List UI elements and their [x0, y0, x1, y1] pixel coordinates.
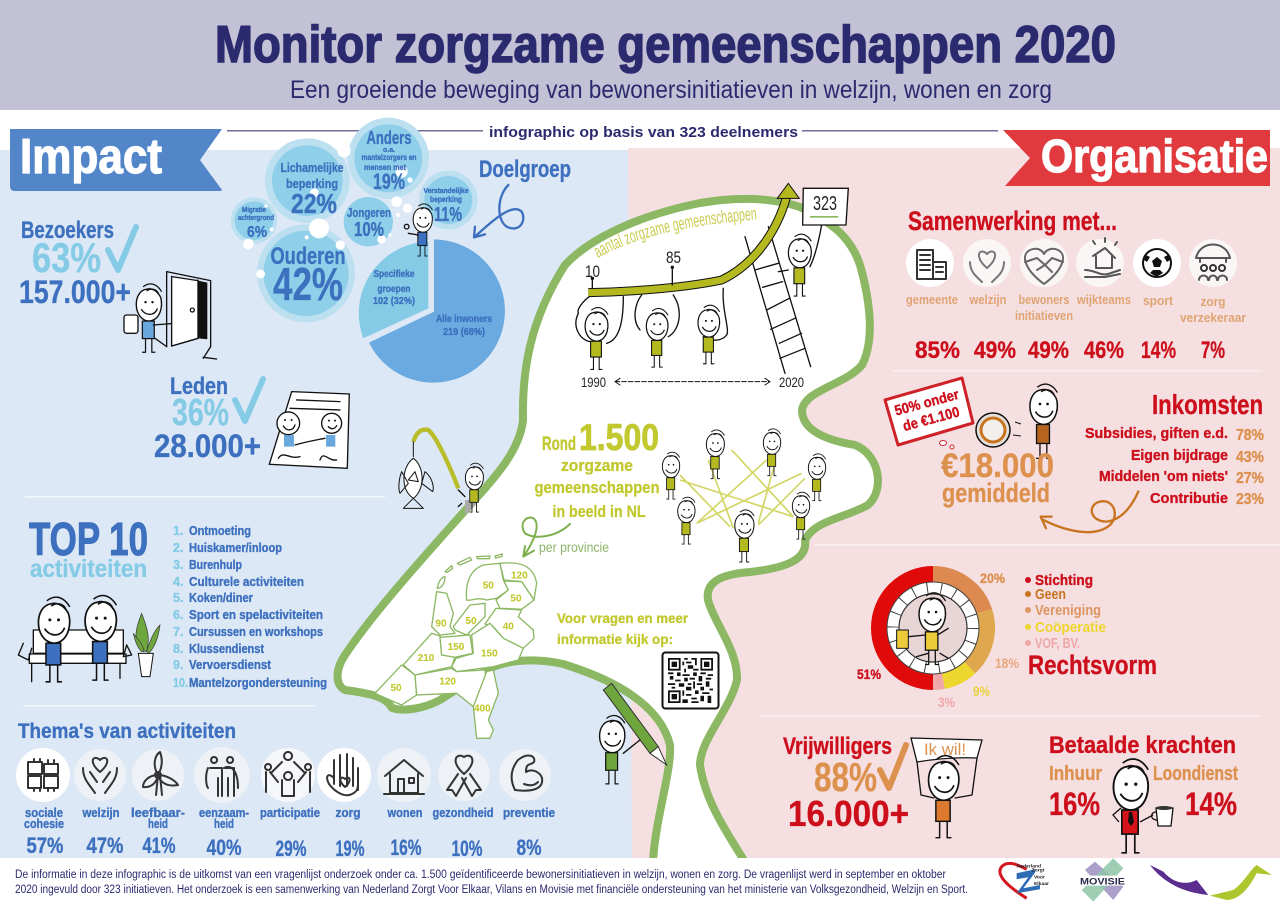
thema's percentages: 40% — [206, 835, 242, 860]
top 10 list: Cursussen en workshops — [189, 625, 323, 639]
map: province values: 150 — [481, 649, 498, 660]
illustration: person at door — [124, 272, 217, 359]
impact banner — [10, 129, 222, 191]
illustration: fisherman — [399, 430, 483, 515]
samenwerking labels: sport — [1143, 293, 1174, 308]
top 10 list: 2. — [173, 541, 183, 555]
inkomsten: 27% — [1236, 470, 1264, 487]
samenwerking labels: zorg — [1200, 294, 1226, 309]
samenwerking labels: verzekeraar — [1180, 310, 1246, 325]
betaalde krachten statistic — [1049, 732, 1238, 822]
samenwerking percentages — [915, 337, 1225, 364]
top 10 list: 5. — [173, 591, 183, 605]
thema's labels — [24, 806, 555, 831]
doelgroep heading and labels: Verstandelijke — [424, 186, 468, 195]
top 10 list: Klussendienst — [189, 642, 265, 656]
callout: 50% onder de 1.100 — [885, 378, 973, 449]
doelgroep heading and labels: Specifieke — [374, 269, 415, 280]
doelgroep heading and labels: Migratie — [242, 207, 266, 214]
map: province values: 120 — [439, 676, 456, 687]
icons row: thema's — [16, 747, 551, 803]
inkomsten: 78% — [1236, 427, 1264, 444]
panel: impact background — [0, 150, 640, 858]
samenwerking labels: welzijn — [969, 292, 1007, 307]
arrow: per provincie — [523, 518, 609, 557]
doelgroep heading and labels: 219 (68%) — [443, 327, 485, 338]
illustration: signed contract — [269, 392, 349, 468]
thema's labels: heid — [148, 817, 168, 831]
text block: rond 1.500 — [534, 417, 660, 521]
doelgroep heading and labels: 42% — [273, 258, 343, 310]
chart caption: aantal zorgzame gemeenschappen: aantal zorgzame gemeenschappen — [594, 210, 756, 258]
vrijwilligers statistic: 88% — [814, 754, 877, 800]
doelgroep heading and labels: groepen — [378, 284, 410, 295]
text block: rond 1.500: zorgzame — [561, 456, 633, 475]
arrow: doelgroep — [474, 185, 523, 237]
heading: rechtsvorm: Rechtsvorm — [1028, 650, 1157, 680]
thema's percentages: 19% — [336, 836, 364, 861]
leden statistic — [154, 373, 263, 464]
top 10 list: 9. — [173, 658, 183, 672]
thema's percentages — [26, 833, 542, 861]
footer — [0, 858, 1280, 905]
map: province values: 50 — [390, 683, 402, 694]
samenwerking labels: gemeente — [906, 292, 958, 307]
chart numbers: 323 — [813, 193, 837, 215]
donut labels: 51% — [857, 666, 881, 682]
map: province values: 40 — [503, 621, 514, 632]
top 10 list: 3. — [173, 558, 183, 572]
illustration: person on trampoline — [897, 593, 948, 664]
chart numbers: 2020 — [779, 374, 804, 390]
top 10 list: Ontmoeting — [189, 524, 251, 538]
footer: De informatie in deze infographic is de uitkomst van een vragenlijst onderzoek onder ca. 1.500 geïdentificeerde bewonersinitiatieven in welzijn, wonen en zorg. De vragenlijst werd in september en oktober — [15, 869, 946, 881]
map: province values: 150 — [448, 642, 465, 653]
chart numbers: 85 — [666, 248, 681, 267]
network of people — [662, 429, 826, 562]
doelgroep heading and labels: achtergrond — [238, 215, 274, 222]
doelgroep heading and labels: Doelgroep — [479, 156, 571, 183]
doelgroep heading and labels: beperking — [430, 195, 462, 204]
title: Monitor zorgzame gemeenschappen 2020 — [215, 16, 1116, 74]
thema's percentages: 47% — [86, 833, 124, 858]
map: provinces — [375, 554, 537, 738]
text block: rond 1.500: gemeenschappen — [534, 478, 660, 497]
bezoekers statistic: Bezoekers — [21, 217, 114, 244]
donut labels: 3% — [938, 694, 955, 710]
map: province values: 50 — [465, 616, 477, 627]
contact text: Voor vragen en meer — [557, 610, 689, 626]
top 10 list: 10. — [173, 676, 188, 690]
bezoekers statistic — [19, 217, 136, 310]
top 10 list: Mantelzorgondersteuning — [189, 676, 327, 690]
callout: 50% onder de 1.100: 50% onder — [893, 387, 961, 420]
map: province values — [390, 570, 528, 715]
doelgroep heading and labels: Alle inwoners — [436, 314, 492, 325]
thema's labels: gezondheid — [432, 806, 494, 820]
thema's percentages: 16% — [390, 835, 422, 860]
doelgroep heading and labels: beperking — [286, 176, 338, 191]
doelgroep heading and labels: Ouderen — [270, 243, 346, 270]
doelgroep heading and labels: Anders — [366, 128, 412, 148]
thema's labels: welzijn — [82, 806, 120, 820]
doelgroep heading and labels: 6% — [247, 224, 267, 241]
participants line: infographic op basis van 323 deelnemers — [489, 124, 798, 141]
inkomsten: Eigen bijdrage — [1131, 447, 1228, 464]
illustration: person blowing bubbles — [404, 204, 432, 256]
leden statistic: 36% — [172, 392, 229, 434]
statistic: gemiddeld inkomen: gemiddeld — [942, 478, 1050, 508]
samenwerking labels: bewoners — [1018, 292, 1070, 307]
statistic: gemiddeld inkomen — [941, 447, 1054, 508]
thema's percentages: 57% — [26, 833, 64, 858]
top 10 list: Huiskamer/inloop — [189, 541, 282, 555]
donut legend: VOF, BV. — [1035, 635, 1080, 652]
top 10 list: 1. — [173, 524, 183, 538]
top 10 list: Vervoersdienst — [189, 658, 272, 672]
thema's labels: preventie — [503, 806, 555, 820]
map: province values: 50 — [483, 581, 494, 592]
subtitle: Een groeiende beweging van bewonersinitiatieven in welzijn, wonen en zorg — [290, 76, 1052, 104]
doelgroep heading and labels — [238, 128, 571, 338]
illustration: person with sign: Ik wil! — [924, 740, 966, 759]
thema's labels: zorg — [336, 806, 360, 820]
donut legend — [1025, 572, 1106, 652]
doelgroep heading and labels: 102 (32%) — [373, 296, 415, 307]
thema's labels: heid — [214, 817, 234, 831]
heading: samenwerking: Samenwerking met... — [908, 206, 1117, 236]
map: province values: 90 — [435, 619, 447, 630]
map: province values: 50 — [510, 594, 522, 605]
logo: Movisie — [1078, 858, 1127, 902]
callout: 50% onder de 1.100: de €1.100 — [901, 404, 961, 435]
betaalde krachten statistic: Loondienst — [1153, 763, 1238, 785]
map blob: Netherlands shape — [338, 199, 878, 862]
inkomsten: Contributie — [1150, 490, 1228, 507]
donut labels: 9% — [973, 683, 990, 699]
text block: rond 1.500: Rond — [542, 434, 576, 455]
logo: Nederland Zorgt Voor Elkaar: Elkaar — [1034, 881, 1049, 887]
top 10 list: 7. — [173, 625, 183, 639]
top 10 list: 8. — [173, 642, 183, 656]
doelgroep heading and labels: o.a. — [383, 147, 395, 154]
top 10 heading — [29, 513, 148, 583]
donut labels: 18% — [995, 655, 1019, 671]
leden statistic: Leden — [170, 373, 228, 400]
thema's labels: cohesie — [24, 817, 64, 831]
logo: Vilans swimmers — [1150, 865, 1272, 900]
leden statistic: 28.000+ — [154, 428, 261, 464]
statistic: gemiddeld inkomen: €18.000 — [941, 447, 1054, 485]
samenwerking percentages: 85% — [915, 337, 960, 364]
bezoekers statistic: 63% — [32, 234, 101, 281]
doelgroep heading and labels: 10% — [354, 219, 384, 241]
growth chart: stick figures lifting arrow — [576, 183, 848, 385]
thema's percentages: 41% — [142, 833, 176, 858]
contact text: informatie kijk op: — [557, 631, 673, 647]
bezoekers statistic: 157.000+ — [19, 274, 131, 310]
illustration: person rolling coin — [976, 384, 1057, 458]
logo: Nederland Zorgt Voor Elkaar: Nederland — [1017, 863, 1041, 869]
vrijwilligers statistic: 16.000+ — [788, 793, 909, 834]
map: province values: 120 — [511, 570, 528, 581]
heading: thema's: Thema's van activiteiten — [18, 720, 236, 743]
samenwerking percentages: 7% — [1201, 337, 1225, 364]
top 10 list: Culturele activiteiten — [189, 575, 304, 589]
illustration: person with sign — [911, 738, 982, 838]
top 10 list: Burenhulp — [189, 558, 242, 572]
map: province values: 400 — [474, 704, 491, 715]
top 10 heading: activiteiten — [30, 555, 147, 583]
betaalde krachten statistic: Inhuur — [1049, 763, 1102, 785]
top 10 list: 6. — [173, 608, 183, 622]
donut legend: Geen — [1035, 586, 1066, 603]
thema's percentages: 10% — [452, 836, 482, 861]
inkomsten: Subsidies, giften e.d. — [1085, 425, 1228, 442]
samenwerking labels: initiatieven — [1015, 308, 1073, 323]
logo: Nederland Zorgt Voor Elkaar: Voor — [1034, 874, 1045, 880]
inkomsten: 23% — [1236, 491, 1264, 508]
top 10 list — [173, 524, 327, 690]
thema's labels: eenzaam- — [199, 806, 249, 820]
chart numbers: 1990 — [581, 374, 606, 390]
footer: 2020 ingevuld door 323 initiatieven. Het onderzoek is een samenwerking van Nederland Zorgt Voor Elkaar, Vilans en Movisie met financiële ondersteuning van het ministerie van Volksgezondheid, Welzijn en Sport. — [15, 884, 968, 896]
chart numbers — [581, 193, 837, 390]
thema's labels: participatie — [260, 806, 320, 820]
doelgroep heading and labels: mantelzorgers en — [362, 153, 417, 162]
betaalde krachten statistic: Betaalde krachten — [1049, 732, 1236, 759]
contact text — [557, 610, 689, 647]
thema's labels: sociale — [25, 806, 63, 820]
arrow: inkomsten to gemiddeld — [1041, 492, 1138, 532]
vrijwilligers statistic: Vrijwilligers — [783, 733, 892, 760]
arrow: per provincie: per provincie — [539, 539, 609, 555]
qr code — [662, 652, 718, 708]
doelgroep heading and labels: mensen met — [364, 163, 406, 172]
thema's labels: wonen — [387, 806, 422, 820]
betaalde krachten statistic: 14% — [1185, 786, 1237, 822]
doelgroep heading and labels: 22% — [291, 188, 337, 219]
inkomsten — [1085, 389, 1264, 508]
illustration: two people on bench with plant — [18, 595, 160, 682]
illustration: person with coffee — [1113, 759, 1173, 853]
samenwerking percentages: 49% — [1028, 337, 1069, 364]
donut legend: Vereniging — [1035, 602, 1101, 619]
doelgroep heading and labels: Lichamelijke — [280, 160, 344, 175]
samenwerking labels: wijkteams — [1076, 292, 1131, 307]
thema's labels: leefbaar- — [131, 806, 185, 820]
doelgroep heading and labels: 11% — [434, 204, 462, 226]
donut labels — [857, 570, 1019, 710]
donut labels: 20% — [980, 570, 1005, 586]
samenwerking percentages: 46% — [1084, 337, 1124, 364]
top 10 list: Sport en spelactiviteiten — [189, 608, 323, 622]
logo: Nederland Zorgt Voor Elkaar — [1000, 863, 1049, 898]
vrijwilligers statistic — [783, 733, 909, 834]
text block: rond 1.500: 1.500 — [579, 417, 659, 458]
top 10 list: 4. — [173, 575, 183, 589]
header band — [0, 0, 1280, 110]
logo: Movisie: MOVISIE — [1080, 876, 1125, 886]
donut chart: rechtsvorm — [879, 574, 987, 682]
text block: rond 1.500: in beeld in NL — [552, 502, 646, 521]
icons row: samenwerking — [906, 238, 1237, 287]
samenwerking percentages: 49% — [974, 337, 1016, 364]
donut legend: Stichting — [1035, 572, 1093, 589]
top 10 heading: TOP 10 — [29, 513, 148, 565]
logo: Nederland Zorgt Voor Elkaar: Zorgt — [1032, 868, 1045, 874]
inkomsten: Middelen 'om niets' — [1099, 468, 1228, 485]
illustration: person with pencil — [600, 683, 667, 784]
samenwerking labels — [906, 292, 1246, 325]
thema's percentages: 8% — [516, 835, 542, 860]
thema's percentages: 29% — [276, 836, 306, 861]
top 10 list: Koken/diner — [189, 591, 253, 605]
betaalde krachten statistic: 16% — [1049, 786, 1100, 822]
donut legend: Coöperatie — [1035, 619, 1106, 636]
impact banner: Impact — [20, 130, 162, 184]
doelgroep heading and labels: 19% — [373, 169, 405, 194]
chart numbers: 10 — [585, 262, 600, 281]
inkomsten: 43% — [1236, 449, 1264, 466]
doelgroep bubbles and pie chart — [231, 118, 505, 383]
map: province values: 210 — [418, 653, 435, 664]
panel: organisatie background — [628, 148, 1280, 858]
doelgroep heading and labels: Jongeren — [347, 205, 391, 220]
samenwerking percentages: 14% — [1141, 337, 1176, 364]
